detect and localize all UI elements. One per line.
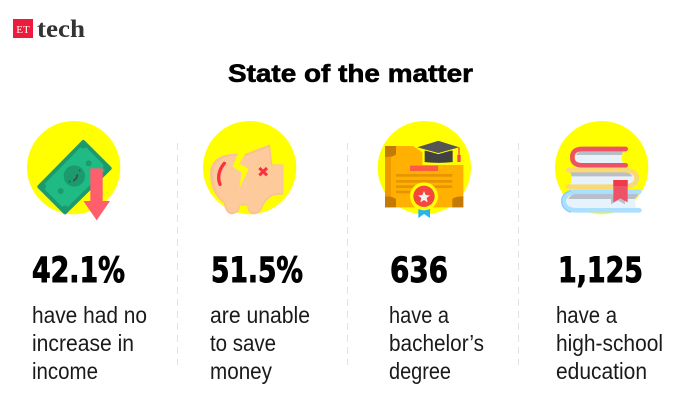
icon: broken piggy bank (203, 121, 296, 214)
value: 1,125 (558, 251, 643, 291)
icon: diploma with graduation cap (378, 121, 471, 218)
panel: savings stat (203, 121, 310, 384)
panel: income stat (27, 121, 147, 384)
description: to save (210, 330, 276, 356)
description (389, 302, 484, 384)
icon: banknote with down arrow (27, 121, 120, 220)
description: high-school (556, 330, 663, 356)
logo: ET tech (13, 16, 85, 43)
description (556, 302, 663, 384)
logo: ET tech: ET (16, 24, 30, 36)
icon: stack of books (555, 121, 648, 214)
value: 51.5% (211, 251, 303, 291)
description: degree (389, 358, 451, 384)
value: 636 (390, 251, 448, 291)
description: income (32, 358, 98, 384)
description: education (556, 358, 647, 384)
description (32, 302, 147, 384)
value: 42.1% (32, 251, 125, 291)
description: money (210, 358, 272, 384)
description: increase in (32, 330, 134, 356)
description: have had no (32, 302, 147, 328)
description: have a (389, 302, 449, 328)
description (210, 302, 310, 384)
panel: high-school stat (555, 121, 663, 384)
title: State of the matter (228, 60, 473, 88)
panel: bachelor's stat (378, 121, 484, 384)
logo: ET tech: tech (37, 16, 85, 43)
description: bachelor’s (389, 330, 484, 356)
description: have a (556, 302, 617, 328)
description: are unable (210, 302, 310, 328)
